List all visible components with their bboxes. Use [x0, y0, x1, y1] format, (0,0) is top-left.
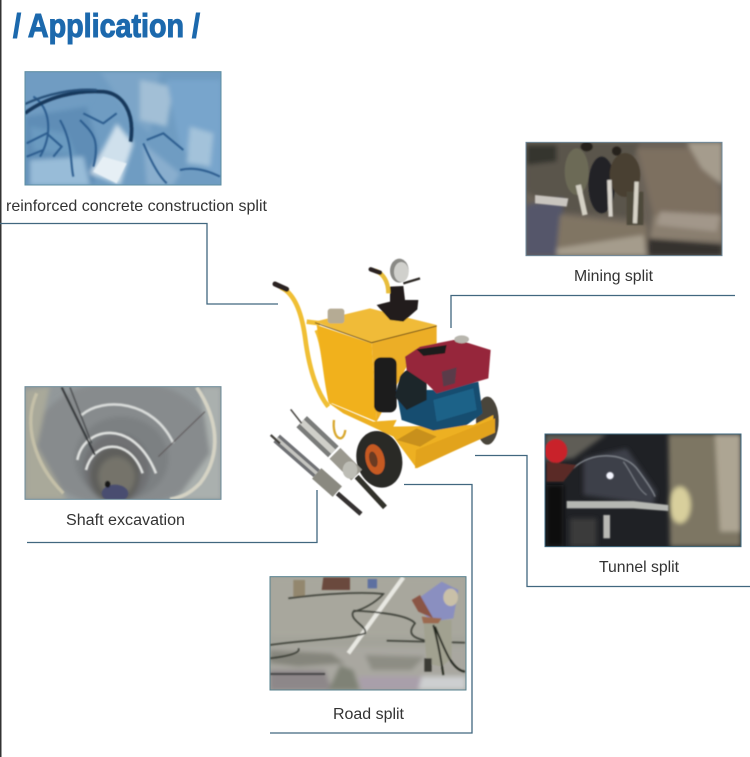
label: Road split	[333, 706, 405, 723]
engine lower block	[396, 382, 483, 431]
front wheel	[350, 426, 408, 493]
right handle	[375, 271, 388, 293]
breakers	[302, 422, 333, 452]
filler cap	[328, 309, 344, 323]
label: Tunnel split	[599, 559, 680, 576]
panel: tunnel split	[475, 434, 750, 586]
photo: shaft	[25, 380, 221, 507]
left edge line	[0, 0, 2, 757]
connector	[270, 484, 472, 733]
photo: tunnel	[545, 434, 741, 547]
title: / Application /	[13, 7, 200, 44]
label: Mining split	[574, 268, 654, 285]
connector	[0, 224, 278, 304]
photo: miners	[526, 142, 722, 256]
panel: reinforced concrete construction split	[0, 72, 278, 304]
label: reinforced concrete construction split	[6, 198, 268, 215]
base platform	[327, 402, 493, 468]
connector	[451, 296, 735, 328]
connector	[27, 490, 317, 542]
pump and valve	[377, 286, 418, 322]
engine red head	[405, 339, 491, 393]
label: Shaft excavation	[66, 512, 185, 529]
panel: shaft excavation	[25, 380, 317, 542]
rear wheel	[476, 397, 499, 445]
hydraulic splitter machine	[271, 259, 499, 514]
panel: road split	[270, 484, 472, 733]
left handle frame	[281, 287, 332, 407]
pressure gauge	[390, 259, 409, 283]
connector	[475, 456, 750, 586]
photo: blue rock	[25, 72, 221, 185]
black cylinder	[374, 357, 397, 412]
tank	[317, 325, 377, 422]
panel: mining split	[451, 142, 735, 328]
air filter	[395, 368, 427, 410]
photo: road	[270, 577, 466, 690]
